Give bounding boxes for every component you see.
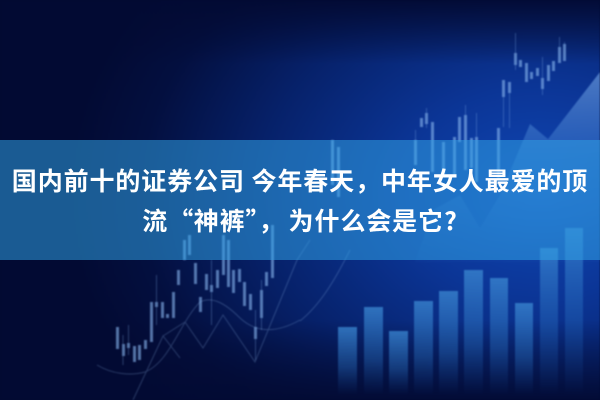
title: 流“神裤”，为什么会是它? bbox=[142, 202, 458, 238]
title band bbox=[0, 140, 600, 260]
area chart: mountain shape bbox=[415, 72, 600, 262]
candlestick chart bbox=[116, 33, 566, 365]
trend lines bbox=[97, 240, 350, 400]
candles: upper right group bbox=[331, 33, 566, 197]
candles: lower left group bbox=[116, 225, 274, 365]
title: 国内前十的证券公司 今年春天，中年女人最爱的顶 bbox=[12, 162, 588, 198]
title bbox=[12, 162, 588, 238]
bar chart bbox=[338, 228, 583, 395]
